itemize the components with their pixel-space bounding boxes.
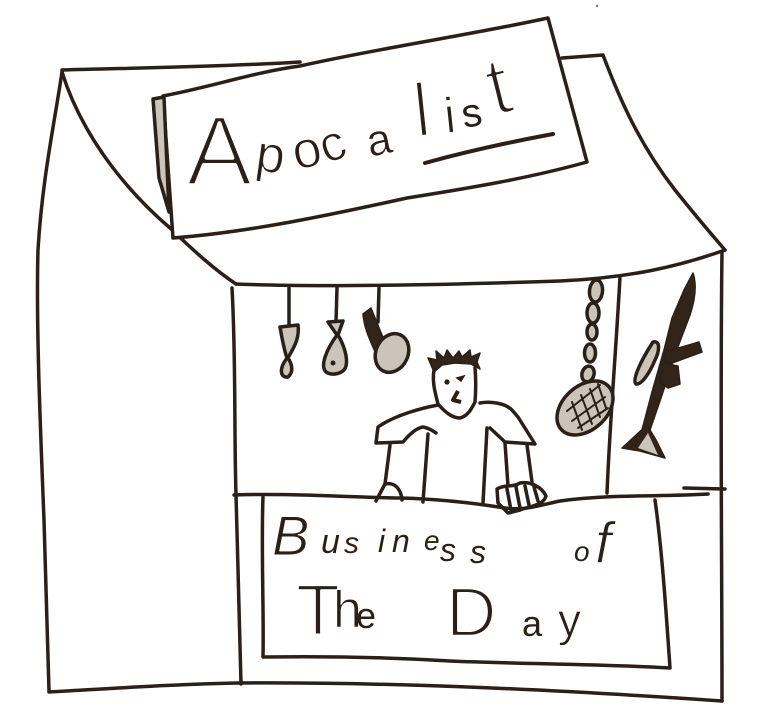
paper speck: [596, 5, 598, 7]
sign side edge: [153, 97, 169, 212]
assault rifle: [622, 273, 702, 458]
title underline: [425, 134, 553, 163]
front grip: [635, 342, 659, 384]
head: [433, 368, 476, 418]
hanging meat 3 with bone: [363, 308, 415, 378]
counter sign: Business of The Day: [262, 497, 670, 668]
shopkeeper figure: [376, 350, 546, 513]
counter sign bottom line text: The D a y: [296, 571, 581, 651]
roof awning: [62, 55, 725, 286]
sign board: [163, 18, 587, 238]
market stall building outline: [37, 72, 722, 701]
counter sign top line text: B us in es s of: [272, 504, 617, 576]
right hand: [497, 483, 546, 513]
counter sign frame: [262, 497, 670, 668]
sausage links: [589, 279, 603, 303]
ham with netting: [546, 370, 624, 446]
barrel and body: [642, 273, 695, 430]
eyes and nose: [444, 379, 450, 385]
hanging meat 1: [280, 325, 298, 377]
left hand: [376, 484, 402, 501]
hair: [428, 350, 480, 372]
stock: [622, 425, 665, 458]
hanging strings: [289, 288, 379, 325]
magazine crosspiece: [665, 342, 702, 363]
sign title text: Apocalist: [186, 40, 521, 207]
shop sign: Apocalist: [153, 18, 587, 238]
stall divider post: [607, 277, 620, 493]
hanging meat 2: [324, 321, 347, 374]
hanging sausages and ham: [546, 279, 624, 446]
pistol grip: [660, 363, 680, 388]
stall counter: [234, 488, 725, 509]
shirt and arms: [376, 405, 438, 443]
